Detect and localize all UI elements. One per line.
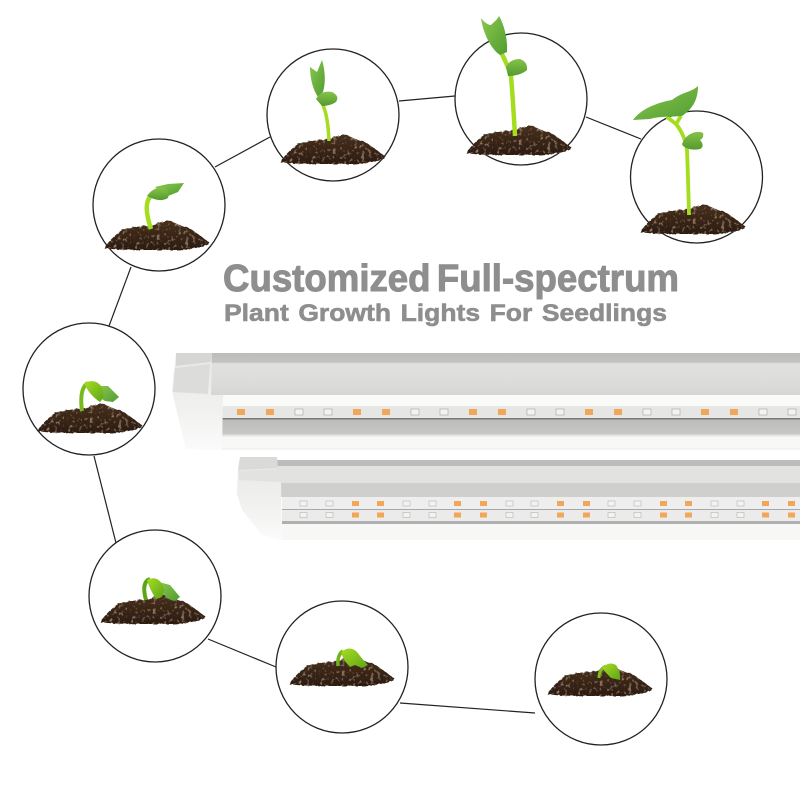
end cap xyxy=(237,457,282,540)
title line 2: Plant Growth Lights For Seedlings xyxy=(224,300,667,327)
stage 1: seed sprouting in soil xyxy=(535,613,667,745)
stage 3: sprout with folded leaf xyxy=(89,530,221,662)
LEDs row 1 xyxy=(300,501,795,506)
end cap xyxy=(172,353,223,450)
title line 1: Customized Full-spectrum xyxy=(223,258,679,300)
LEDs xyxy=(237,409,796,415)
stage 6: young seedling xyxy=(267,49,399,181)
connector lines between growth stages xyxy=(94,96,641,713)
stage 8: mature seedling with large leaf xyxy=(630,86,762,243)
stage 7: taller seedling xyxy=(455,16,587,165)
LED tube light: lower xyxy=(237,457,800,540)
stage 5: stem with opening leaf xyxy=(93,139,225,271)
LED tube light: upper xyxy=(172,353,800,450)
stage 4: stem arching with first leaf xyxy=(23,323,155,455)
title xyxy=(223,258,679,327)
stage 2: sprout emerging xyxy=(276,601,408,733)
LEDs row 2 xyxy=(300,512,795,518)
